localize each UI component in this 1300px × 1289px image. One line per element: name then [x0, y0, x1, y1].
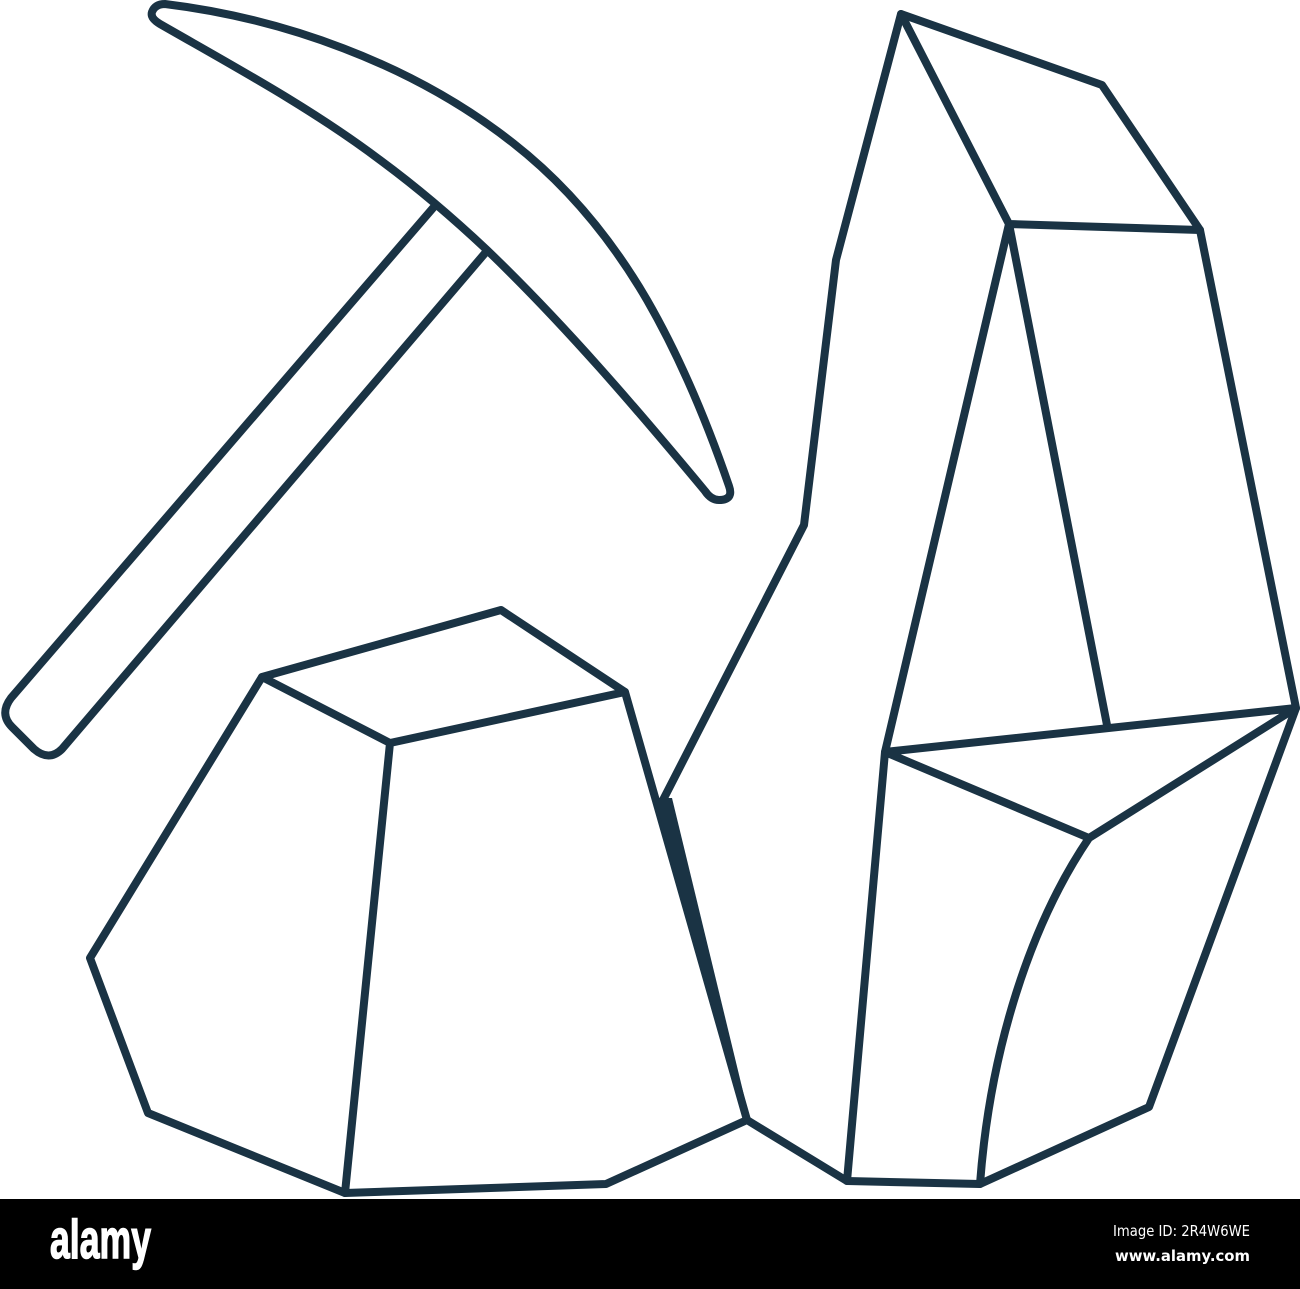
icon: pickaxe: [5, 4, 730, 756]
left rock outline: [90, 610, 747, 1193]
footer image id: Image ID: 2R4W6WE: [1113, 1222, 1250, 1240]
footer website: www.alamy.com: [1115, 1247, 1250, 1265]
pickaxe handle: [5, 208, 486, 756]
right rock outline: [663, 14, 1296, 1184]
right rock lower facets: [847, 708, 1296, 1184]
left rock facets: [262, 677, 625, 1193]
pickaxe head: [152, 4, 730, 500]
right rock upper facets: [885, 14, 1200, 752]
footer banner: [0, 1199, 1300, 1289]
icon: left rock: [90, 610, 747, 1193]
footer logo: alamy: alamy: [50, 1208, 151, 1270]
thick shared edge between rocks: [655, 798, 749, 1116]
icon: right crystal rock: [655, 14, 1296, 1184]
